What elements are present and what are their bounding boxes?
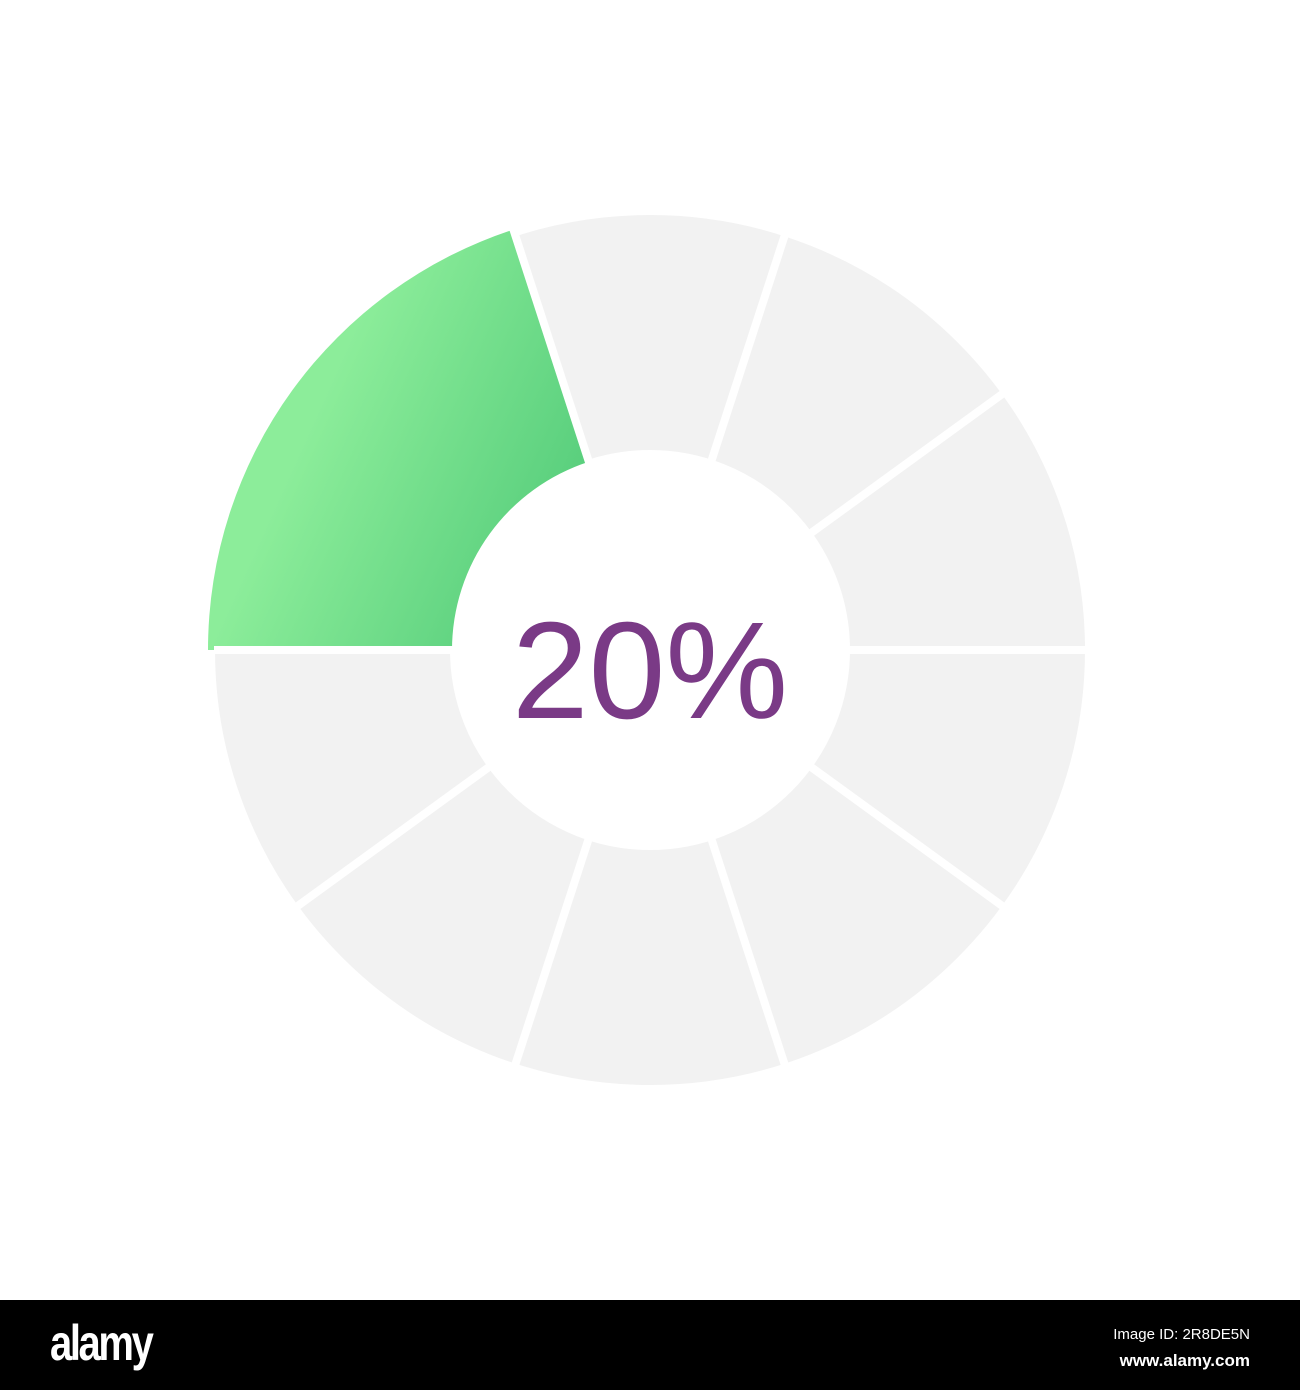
green filled segment (20%): [208, 230, 589, 650]
image id text: Image ID: 2R8DE5N: [1113, 1326, 1250, 1343]
image id text: [1113, 1326, 1250, 1370]
footer bar: [0, 1300, 1300, 1390]
grey ring segments: [332, 332, 968, 968]
logo: alamy: alamy: [50, 1315, 151, 1371]
image id text: www.alamy.com: [1120, 1351, 1250, 1370]
center percentage label: 20%: [512, 594, 788, 748]
